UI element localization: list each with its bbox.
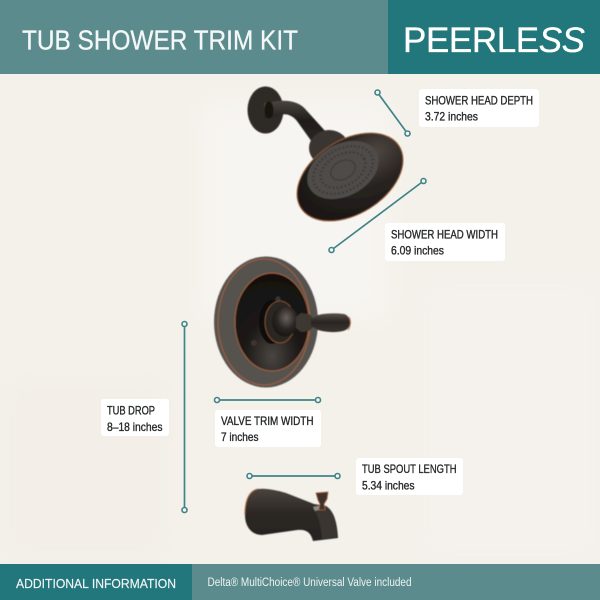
label: valve trim width: VALVE TRIM WIDTH [221, 414, 314, 428]
inner plate [235, 273, 309, 371]
label: shower head depth [419, 89, 539, 127]
footer: valve note: Delta® MultiChoice® Universal Valve included [208, 577, 412, 589]
label: shower head width: 6.09 inches [391, 244, 444, 258]
dimension: valve trim width [214, 398, 320, 402]
wall flange [248, 86, 284, 134]
shower head [248, 86, 419, 239]
spout outlet highlight [313, 507, 337, 539]
shower arm [264, 101, 326, 142]
dimension: tub spout length [247, 474, 340, 478]
label: shower head width [385, 223, 505, 261]
dimension: shower head depth [375, 90, 410, 136]
valve trim [214, 256, 350, 388]
label: tub spout length: 5.34 inches [362, 478, 414, 492]
dimension: shower head width [329, 178, 426, 252]
label: shower head depth: SHOWER HEAD DEPTH [425, 94, 533, 108]
brand logo: PEERLESS [403, 21, 585, 60]
label: shower head width: SHOWER HEAD WIDTH [391, 228, 498, 242]
footer: additional information [0, 564, 192, 600]
handle nut [296, 313, 313, 332]
diverter knob [316, 492, 328, 510]
spray face [297, 129, 389, 211]
spout body [245, 489, 338, 541]
label: valve trim width [215, 410, 321, 447]
label: tub drop: 8–18 inches [107, 420, 162, 434]
header: brand logo panel [388, 0, 600, 74]
handle lever [311, 313, 350, 332]
header: title bar [0, 0, 388, 74]
label: shower head depth: 3.72 inches [425, 110, 478, 124]
label: valve trim width: 7 inches [221, 430, 258, 444]
head bowl [281, 115, 419, 239]
handle base [259, 300, 285, 344]
title: TUB SHOWER TRIM KIT [22, 24, 298, 56]
dimension: tub drop [182, 322, 187, 512]
tub spout [245, 489, 338, 541]
label: tub spout length: TUB SPOUT LENGTH [362, 462, 456, 476]
trim plate [214, 256, 318, 388]
footer: valve note [192, 564, 600, 600]
label: tub spout length [356, 458, 463, 495]
label: tub drop: TUB DROP [107, 404, 155, 418]
label: tub drop [101, 399, 169, 436]
footer: additional information: ADDITIONAL INFORMATION [16, 576, 176, 591]
neck [309, 130, 349, 166]
